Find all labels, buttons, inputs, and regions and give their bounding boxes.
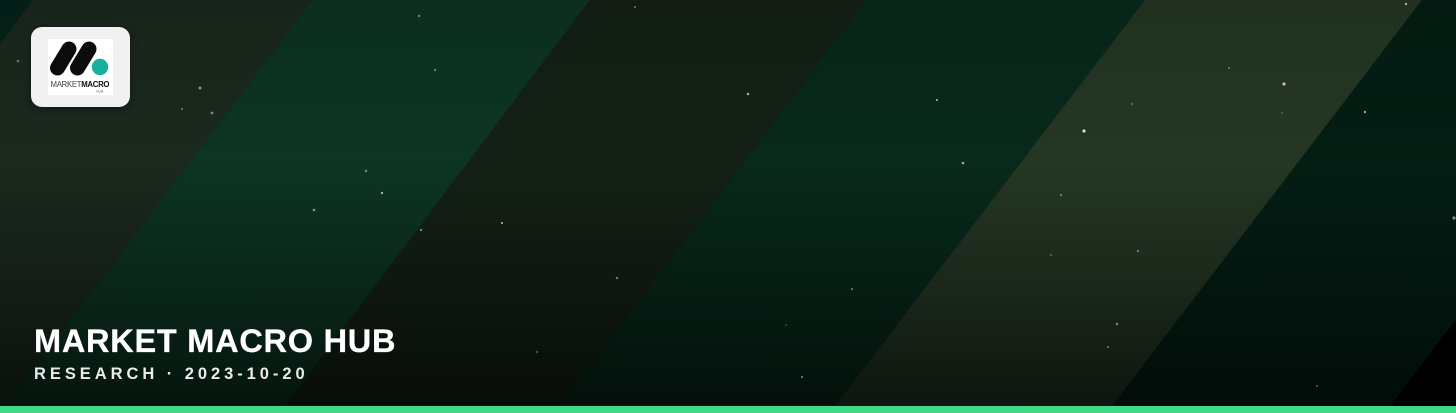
logo card xyxy=(31,27,130,107)
title: MARKET MACRO HUB xyxy=(34,323,396,359)
accent bar xyxy=(0,406,1456,413)
subtitle: RESEARCH · 2023-10-20 xyxy=(34,365,309,383)
logo mark: MARKETMACRO xyxy=(50,80,110,89)
logo mark xyxy=(48,39,113,95)
logo mark: HUB xyxy=(96,90,104,94)
